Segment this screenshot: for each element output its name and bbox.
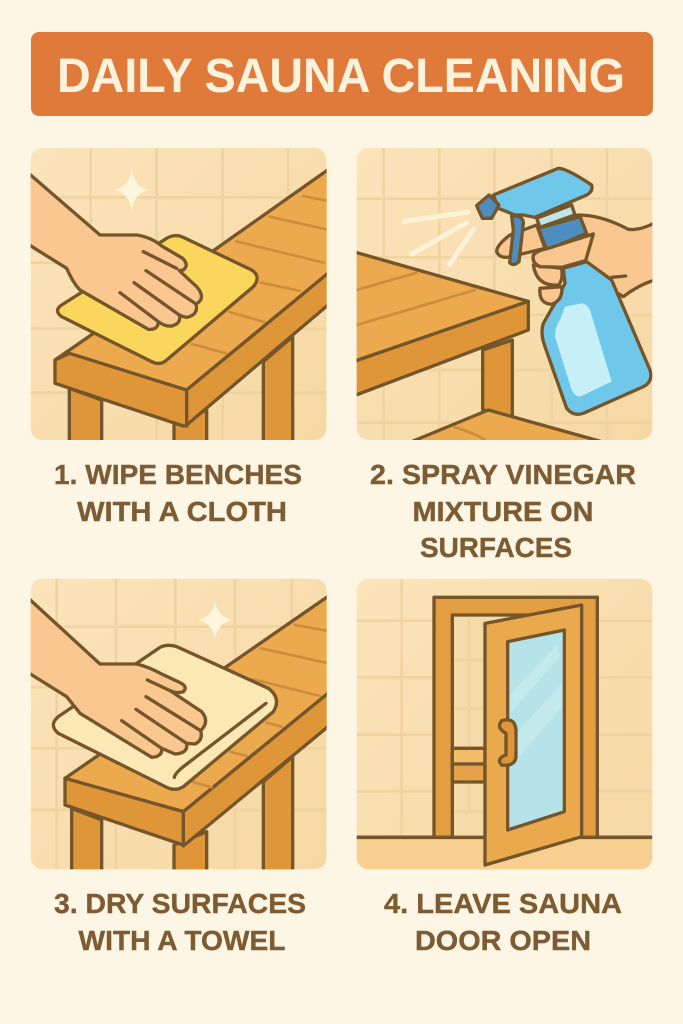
spray bottle <box>477 168 651 414</box>
label 3 <box>54 888 306 956</box>
gripping fingers <box>497 225 626 304</box>
door <box>485 605 582 865</box>
spray mist <box>402 212 475 266</box>
bench <box>353 252 602 442</box>
bench <box>65 595 330 872</box>
panel: wipe benches <box>27 148 330 442</box>
label 2 <box>370 459 636 563</box>
label 4: DOOR OPEN <box>415 925 591 956</box>
sparkle icon <box>114 168 148 211</box>
bench <box>55 168 330 442</box>
floor <box>357 837 652 871</box>
label 3: 3. DRY SURFACES <box>54 888 306 919</box>
label 3: WITH A TOWEL <box>78 925 286 956</box>
label 2: MIXTURE ON <box>412 496 594 527</box>
cloth <box>57 236 257 363</box>
trigger <box>510 216 523 264</box>
label 1: 1. WIPE BENCHES <box>54 459 302 490</box>
towel <box>53 645 277 789</box>
title banner <box>31 32 653 116</box>
door handle <box>500 720 516 765</box>
glass <box>508 630 564 830</box>
hand back <box>576 213 652 298</box>
hand <box>27 172 202 329</box>
inner bench <box>452 748 485 782</box>
label 4: 4. LEAVE SAUNA <box>384 888 622 919</box>
label 4 <box>384 888 622 956</box>
label 2: SURFACES <box>420 532 572 563</box>
door frame <box>434 597 597 837</box>
panel: leave door open <box>357 579 652 871</box>
panel: spray vinegar <box>353 148 655 442</box>
sparkle icon <box>198 601 232 640</box>
title: DAILY SAUNA CLEANING <box>57 50 625 103</box>
label 1 <box>54 459 302 527</box>
label 1: WITH A CLOTH <box>77 496 287 527</box>
label 2: 2. SPRAY VINEGAR <box>370 459 636 490</box>
hand <box>27 597 206 757</box>
panel: dry surfaces <box>27 579 330 872</box>
